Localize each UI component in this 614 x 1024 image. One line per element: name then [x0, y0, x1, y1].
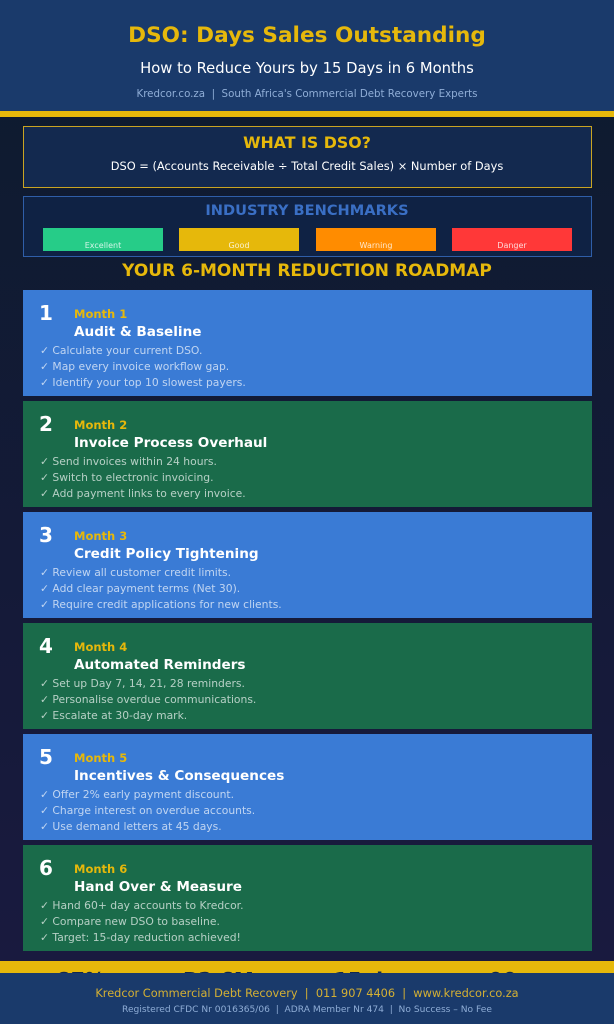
gold header rule	[0, 111, 614, 117]
stat: days: 15 days	[334, 968, 421, 992]
checklist item: ✓ Compare new DSO to baseline.	[40, 915, 220, 928]
header band	[0, 0, 614, 111]
checklist item: ✓ Map every invoice workflow gap.	[40, 360, 229, 373]
checklist item: ✓ Send invoices within 24 hours.	[40, 455, 217, 468]
checklist item: ✓ Set up Day 7, 14, 21, 28 reminders.	[40, 677, 245, 690]
checklist item: ✓ Escalate at 30-day mark.	[40, 709, 187, 722]
month label: Month 5	[74, 751, 127, 765]
step number: 2	[39, 412, 53, 436]
panel heading: WHAT IS DSO?	[243, 133, 371, 152]
checklist item: ✓ Use demand letters at 45 days.	[40, 820, 222, 833]
panel: month 3	[23, 512, 592, 618]
month label: Month 3	[74, 529, 127, 543]
checklist item: ✓ Require credit applications for new clients.	[40, 598, 282, 611]
checklist item: ✓ Review all customer credit limits.	[40, 566, 231, 579]
benchmark: warning: Warning	[360, 241, 392, 250]
checklist item: ✓ Personalise overdue communications.	[40, 693, 256, 706]
step number: 5	[39, 745, 53, 769]
panel: what is DSO	[23, 126, 592, 188]
benchmark: excellent: Excellent	[85, 241, 121, 250]
checklist item: ✓ Add clear payment terms (Net 30).	[40, 582, 240, 595]
benchmark: good: Good	[228, 241, 250, 250]
benchmark: good	[179, 228, 299, 251]
clipped stats band	[0, 961, 614, 973]
formula: DSO = (Accounts Receivable ÷ Total Credit Sales) × Number of Days	[111, 159, 503, 173]
title: DSO: Days Sales Outstanding	[128, 23, 486, 48]
step number: 6	[39, 856, 53, 880]
benchmarks heading: INDUSTRY BENCHMARKS	[205, 202, 409, 219]
benchmark: danger	[452, 228, 572, 251]
tagline: Kredcor.co.za | South Africa's Commercial Debt Recovery Experts	[136, 88, 478, 100]
step title: Incentives & Consequences	[74, 768, 284, 784]
checklist item: ✓ Hand 60+ day accounts to Kredcor.	[40, 899, 244, 912]
checklist item: ✓ Add payment links to every invoice.	[40, 487, 246, 500]
benchmark: danger: Danger	[497, 241, 527, 250]
checklist item: ✓ Offer 2% early payment discount.	[40, 788, 234, 801]
panel: month 6	[23, 845, 592, 951]
panel: month 4	[23, 623, 592, 729]
checklist item: ✓ Target: 15-day reduction achieved!	[40, 931, 241, 944]
stat: rand value: R2.6M	[183, 968, 254, 992]
step title: Automated Reminders	[74, 657, 246, 673]
month label: Month 2	[74, 418, 127, 432]
checklist item: ✓ Charge interest on overdue accounts.	[40, 804, 255, 817]
benchmark: excellent	[43, 228, 163, 251]
checklist item: ✓ Calculate your current DSO.	[40, 344, 202, 357]
benchmark: warning	[316, 228, 436, 251]
step number: 1	[39, 301, 53, 325]
month label: Month 6	[74, 862, 127, 876]
footer registration line: Registered CFDC Nr 0016365/06 | ADRA Member Nr 474 | No Success – No Fee	[122, 1005, 492, 1015]
step title: Invoice Process Overhaul	[74, 435, 267, 451]
step number: 3	[39, 523, 53, 547]
step title: Credit Policy Tightening	[74, 546, 259, 562]
stat: percentage: 87%	[57, 968, 105, 992]
footer	[0, 973, 614, 1024]
checklist item: ✓ Identify your top 10 slowest payers.	[40, 376, 246, 389]
month label: Month 4	[74, 640, 127, 654]
roadmap heading: YOUR 6-MONTH REDUCTION ROADMAP	[122, 261, 492, 281]
month label: Month 1	[74, 307, 127, 321]
step number: 4	[39, 634, 53, 658]
step title: Audit & Baseline	[74, 324, 201, 340]
panel: industry benchmarks	[23, 196, 592, 257]
stat: count: 90	[489, 968, 517, 992]
checklist item: ✓ Switch to electronic invoicing.	[40, 471, 214, 484]
subtitle: How to Reduce Yours by 15 Days in 6 Months	[140, 60, 474, 77]
step title: Hand Over & Measure	[74, 879, 242, 895]
panel: month 5	[23, 734, 592, 840]
panel: month 1	[23, 290, 592, 396]
footer contact line: Kredcor Commercial Debt Recovery | 011 907 4406 | www.kredcor.co.za	[95, 986, 519, 1000]
panel: month 2	[23, 401, 592, 507]
